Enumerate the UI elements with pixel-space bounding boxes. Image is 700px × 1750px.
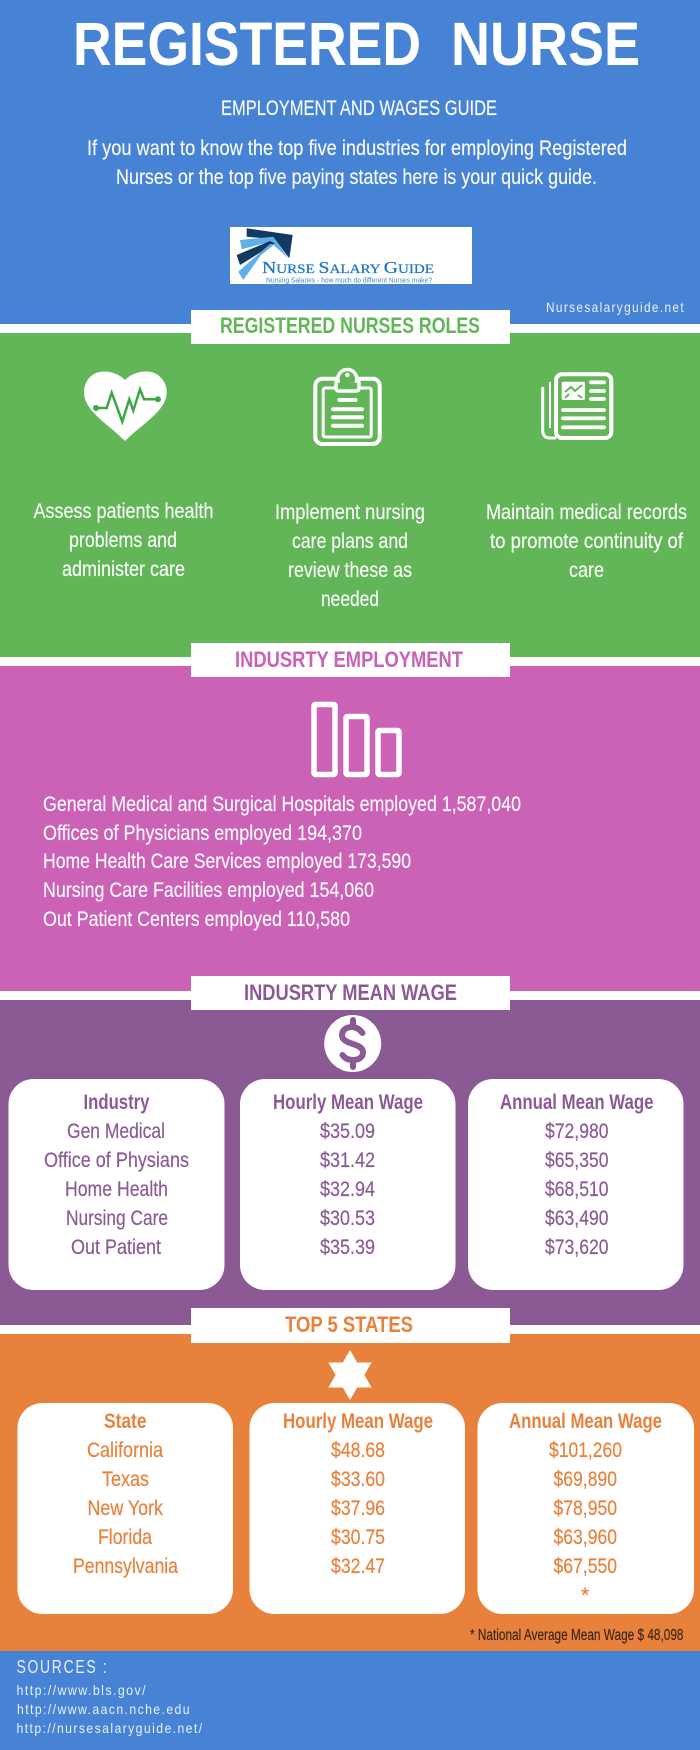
table card: state hourly mean wage: Hourly Mean Wage	[283, 1409, 433, 1433]
role: assess patients	[34, 499, 214, 581]
table card: hourly mean wage: Hourly Mean Wage	[273, 1090, 423, 1114]
panel: sources	[0, 1651, 700, 1750]
table card: hourly mean wage: $35.39	[320, 1235, 375, 1259]
panel: registered nurses roles	[0, 310, 700, 657]
icon: six-point star	[328, 1350, 372, 1400]
role: implement care plans: care plans and	[292, 529, 408, 553]
table card: hourly mean wage: $31.42	[320, 1148, 375, 1172]
panel: header	[0, 0, 700, 324]
heading: roles: REGISTERED NURSES ROLES	[220, 313, 480, 338]
heading: roles	[191, 310, 510, 344]
icon: bar chart	[314, 704, 399, 774]
heading: top 5 states	[191, 1308, 510, 1343]
table card: state annual mean wage: *	[581, 1583, 590, 1607]
table card: state: Texas	[102, 1467, 149, 1491]
role: implement care plans: needed	[321, 587, 379, 611]
heading: mean wage	[191, 976, 510, 1010]
sources links: http://nursesalaryguide.net/	[16, 1720, 204, 1736]
table card: industry	[8, 1079, 224, 1290]
intro text	[87, 136, 627, 189]
table card: industry: Office of Physians	[44, 1148, 189, 1172]
table card: state hourly mean wage: $33.60	[331, 1467, 385, 1491]
role: assess patients: problems and	[69, 528, 177, 552]
table card: state: State	[104, 1409, 147, 1433]
table card: state hourly mean wage: $37.96	[331, 1496, 385, 1520]
heading: top 5 states: TOP 5 STATES	[285, 1312, 413, 1337]
table card: annual mean wage: $63,490	[545, 1206, 609, 1230]
table card: state annual mean wage: $63,960	[554, 1525, 617, 1549]
icon: clipboard	[315, 370, 380, 444]
table card: state annual mean wage: Annual Mean Wage	[509, 1409, 662, 1433]
table card: state annual mean wage: $69,890	[554, 1467, 617, 1491]
logo: Nurse Salary Guide: Nursing Salaries - how much do different Nurses make?	[266, 278, 432, 284]
table card: hourly mean wage: $30.53	[320, 1206, 375, 1230]
table card: state: New York	[88, 1496, 163, 1520]
heading: employment: INDUSRTY EMPLOYMENT	[235, 647, 463, 672]
table card: industry: Out Patient	[71, 1235, 161, 1259]
heading: mean wage: INDUSRTY MEAN WAGE	[244, 980, 457, 1005]
table card: state	[18, 1403, 233, 1614]
table card: hourly mean wage: $35.09	[320, 1119, 375, 1143]
table card: industry: Nursing Care	[66, 1206, 168, 1230]
table card: state annual mean wage	[478, 1403, 694, 1614]
table card: annual mean wage: Annual Mean Wage	[500, 1090, 654, 1114]
table card: state hourly mean wage: $48.68	[331, 1438, 385, 1462]
table card: state annual mean wage: $67,550	[554, 1554, 617, 1578]
employment list	[43, 792, 521, 931]
sources links: http://www.bls.gov/	[16, 1682, 147, 1698]
sources links: http://www.aacn.nche.edu	[17, 1701, 191, 1717]
table card: hourly mean wage: $32.94	[320, 1177, 375, 1201]
employment list: Nursing Care Facilities employed 154,060	[43, 878, 374, 902]
logo: Nurse Salary Guide	[230, 227, 472, 284]
intro text: Nurses or the top five paying states here is your quick guide.	[116, 165, 597, 189]
table card: state hourly mean wage: $30.75	[331, 1525, 385, 1549]
role: maintain records	[486, 500, 687, 582]
table card: industry: Gen Medical	[67, 1119, 165, 1143]
table card: state: Florida	[98, 1525, 152, 1549]
title: NURSE	[451, 10, 640, 79]
icon: newspaper	[543, 374, 611, 438]
table card: industry: Industry	[84, 1090, 150, 1114]
icon: heart with pulse	[84, 372, 167, 441]
sources heading: SOURCES :	[16, 1657, 108, 1677]
table card: annual mean wage	[468, 1079, 684, 1290]
employment list: Out Patient Centers employed 110,580	[43, 907, 350, 931]
heading: employment	[191, 643, 510, 677]
employment list: General Medical and Surgical Hospitals employed 1,587,040	[43, 792, 521, 816]
table card: hourly mean wage	[240, 1079, 456, 1290]
role: implement care plans: review these as	[288, 558, 412, 582]
sources links	[16, 1682, 204, 1736]
logo: Nurse Salary Guide: NURSE SALARY GUIDE	[262, 258, 434, 277]
employment list: Offices of Physicians employed 194,370	[43, 821, 362, 845]
panel: industry mean wage	[0, 976, 700, 1325]
title: REGISTERED	[73, 10, 421, 79]
table card: state annual mean wage: $101,260	[549, 1438, 622, 1462]
role: implement care plans	[275, 500, 425, 611]
table card: annual mean wage: $73,620	[545, 1235, 609, 1259]
panel: top 5 states	[0, 1308, 700, 1651]
table card: state annual mean wage: $78,950	[554, 1496, 617, 1520]
role: assess patients: Assess patients health	[34, 499, 214, 523]
table card: industry: Home Health	[65, 1177, 168, 1201]
table card: state: California	[87, 1438, 163, 1462]
icon: dollar	[324, 1015, 381, 1072]
table card: state: Pennsylvania	[73, 1554, 178, 1578]
role: assess patients: administer care	[62, 557, 185, 581]
table card: state hourly mean wage	[250, 1403, 465, 1614]
table card: annual mean wage: $68,510	[545, 1177, 609, 1201]
table card: annual mean wage: $72,980	[545, 1119, 609, 1143]
panel: industry employment	[0, 643, 700, 991]
role: maintain records: care	[569, 558, 604, 582]
table card: state hourly mean wage: $32.47	[331, 1554, 385, 1578]
employment list: Home Health Care Services employed 173,590	[43, 849, 411, 873]
table card: annual mean wage: $65,350	[545, 1148, 609, 1172]
role: implement care plans: Implement nursing	[275, 500, 425, 524]
subtitle: EMPLOYMENT AND WAGES GUIDE	[221, 96, 497, 120]
